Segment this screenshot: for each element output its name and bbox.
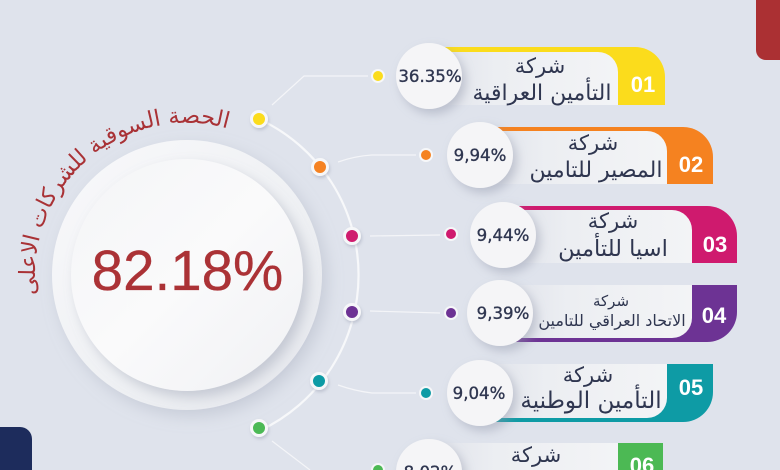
card 03: 9,44% [477,226,529,245]
connector lines [272,76,440,470]
card 01: 36.35% [398,67,462,86]
card 01: التأمين العراقية [473,77,611,106]
card 05: شركة [563,363,613,387]
corner block: navy [0,427,32,470]
card 06 [372,439,663,470]
card 01 [372,43,665,109]
card 04: 9,39% [477,304,529,323]
card 01: 01 [631,72,655,97]
curved heading: الحصة السوقية للشركات الاعلى [18,108,230,294]
card 03: شركة [588,209,638,233]
card 02: المصير للتامين [530,158,662,183]
corner block: red [756,0,780,60]
card 01: شركة [515,54,565,78]
card 04: الاتحاد العراقي للتامين [538,311,686,331]
card 04: شركة [593,292,629,310]
card 03 [445,202,737,268]
card 06: شركة [511,443,561,467]
card 04 [445,280,737,346]
central circle [52,140,322,410]
card 03: اسيا للتأمين [558,233,668,262]
card 05: التأمين الوطنية [520,384,662,414]
total percentage: 82.18% [92,239,283,302]
card 02: شركة [568,131,618,155]
card 05: 9,04% [453,384,505,403]
timeline arc [259,119,359,431]
timeline nodes [252,112,360,436]
card 05: 05 [679,375,703,400]
card 03: 03 [703,232,727,257]
card 02: 02 [679,152,703,177]
card 02 [420,122,713,188]
card 04: 04 [702,303,727,328]
card 05 [420,360,713,426]
card 02: 9,94% [454,146,506,165]
